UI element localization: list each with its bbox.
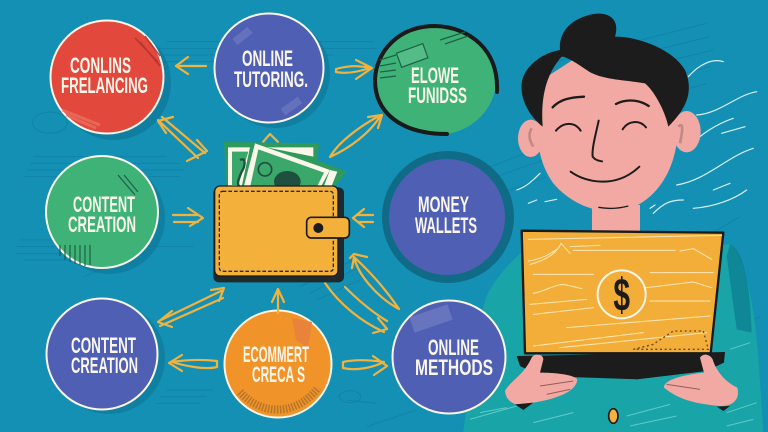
circle: Money Wallets (382, 151, 514, 283)
circle: Online Methods: ONLINE (428, 335, 479, 360)
wallet with bills (213, 142, 349, 282)
circle: Conlins Frelancing (50, 20, 171, 140)
circle: Elowe Funidss (375, 25, 497, 135)
laptop: $ (613, 268, 630, 320)
neck (592, 205, 640, 237)
circle: Conlins Frelancing: FRELANCING (61, 73, 148, 98)
circle: Online Tutoring (214, 14, 330, 128)
bills (224, 142, 347, 192)
nose (593, 121, 602, 161)
circle: Conlins Frelancing: CONLINS (70, 53, 131, 78)
arrow: tutoring to freelancing (176, 57, 206, 74)
circle: Online Tutoring: ONLINE (242, 46, 293, 71)
arrow: ecommerce to blue creation (169, 355, 217, 371)
dollar badge (598, 270, 646, 318)
arrows between circles and wallet (158, 57, 399, 375)
circle: Elowe Funidss: ELOWE (411, 63, 459, 88)
circle: Ecommert Creca S (224, 310, 332, 418)
arrow: peak above wallet (263, 134, 278, 142)
arrow: ecommerce to methods (343, 356, 387, 375)
wavy motion lines (517, 61, 757, 213)
arrow: freelancing to wallet (158, 117, 207, 161)
arrow: methods to wallet (350, 254, 399, 309)
arrow: money wallets to wallet (353, 209, 373, 227)
hair (521, 14, 689, 127)
person body (463, 244, 763, 432)
circle: Content Creation green: CREATION (68, 212, 136, 237)
arrow: creation to wallet (173, 208, 203, 226)
wallet body (213, 187, 344, 282)
circle: Content Creation blue: CREATION (71, 353, 138, 378)
circle: Ecommert Creca S: ECOMMERT (243, 342, 309, 367)
circle: Content Creation green: CONTENT (73, 192, 135, 217)
laptop (517, 231, 725, 379)
head (518, 14, 701, 211)
circle: Money Wallets: MONEY (418, 192, 469, 217)
hands (505, 355, 738, 411)
circle: Ecommert Creca S: CRECA S (252, 362, 305, 387)
arrow: wallet to funds (330, 115, 382, 157)
arrow: ecommerce to wallet (272, 289, 284, 313)
smile (571, 167, 639, 182)
circle: Online Methods: METHODS (415, 355, 493, 380)
person head and laptop (505, 14, 738, 411)
circle: Content Creation blue: CONTENT (71, 333, 136, 358)
wallet clasp (307, 217, 349, 238)
laptop base (517, 352, 725, 379)
circle: Content Creation green (46, 156, 165, 274)
arrow: wallet to methods (325, 283, 387, 333)
eyes and eyebrows (553, 97, 649, 107)
arrow: blue creation to wallet (158, 288, 224, 327)
circle: Online Tutoring: TUTORING. (234, 67, 308, 92)
circle: Elowe Funidss: FUNIDSS (408, 83, 467, 108)
circle: Money Wallets: WALLETS (415, 213, 477, 238)
arrow: tutoring to funds (336, 60, 372, 79)
circle: Online Methods (392, 300, 506, 414)
circle: Content Creation blue (46, 298, 165, 414)
